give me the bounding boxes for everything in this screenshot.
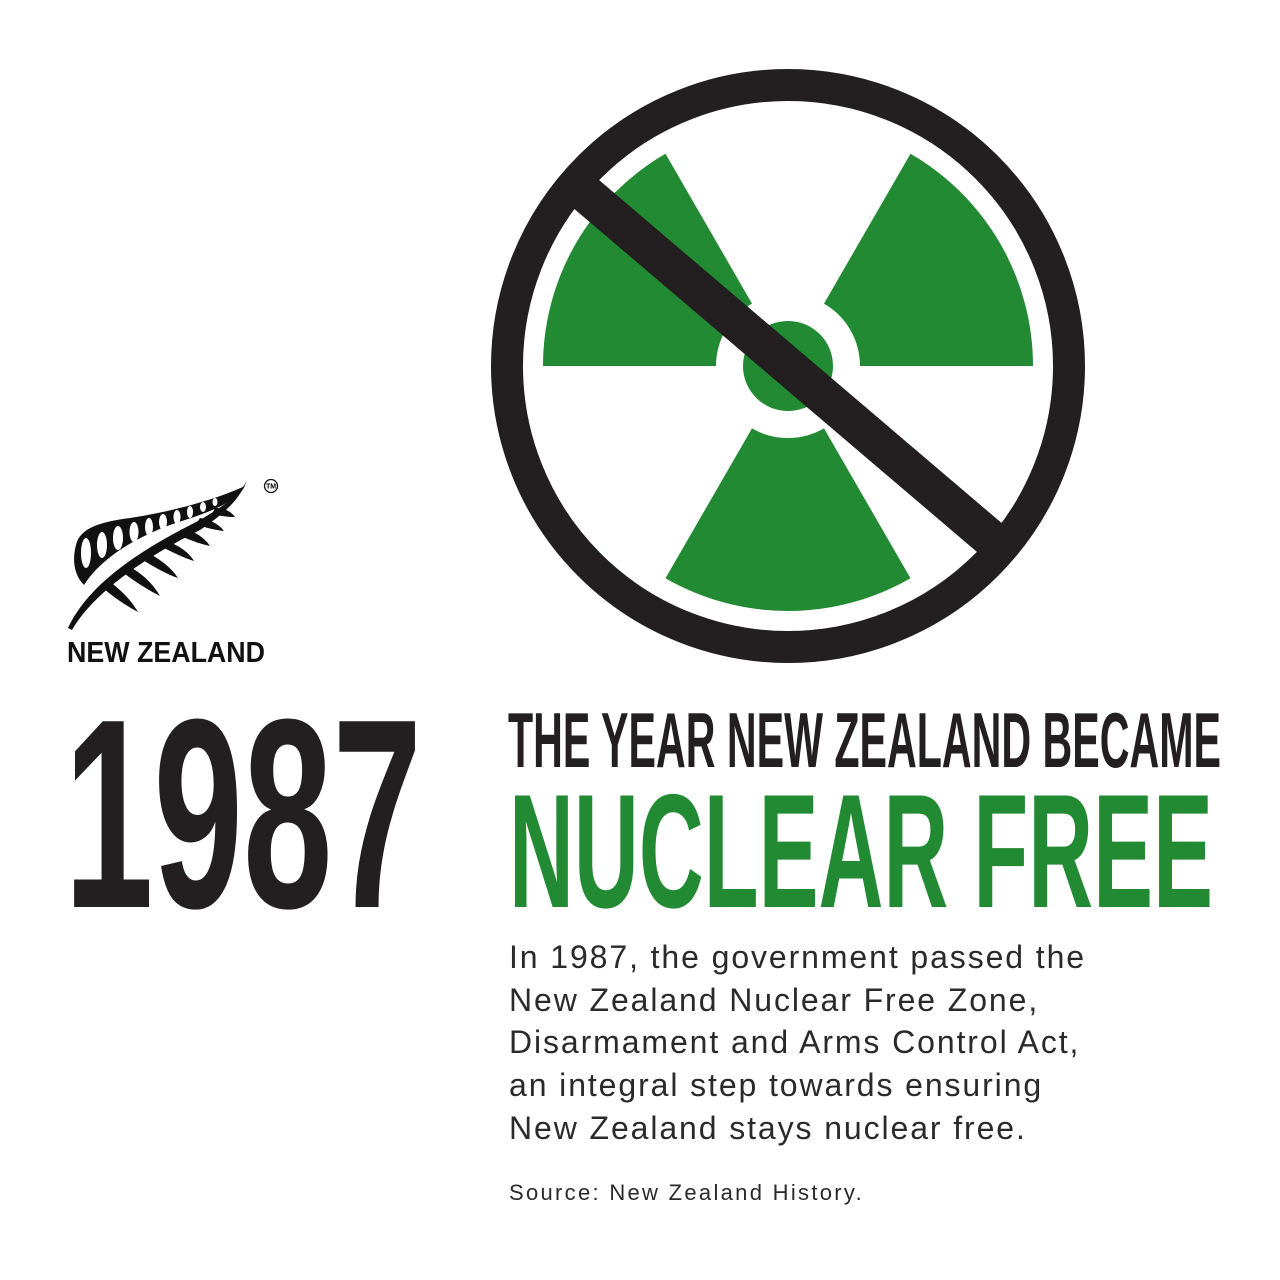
- source: Source: New Zealand History.: [509, 1180, 864, 1205]
- body text: Disarmament and Arms Control Act,: [509, 1024, 1080, 1060]
- logo: silver fern: [68, 480, 247, 630]
- prohibition ring: [507, 85, 1069, 647]
- icon: no-nuclear sign: [507, 85, 1069, 647]
- body text: New Zealand Nuclear Free Zone,: [509, 982, 1039, 1018]
- body text: In 1987, the government passed the: [509, 939, 1086, 975]
- body text: [509, 939, 1086, 1146]
- trademark: [264, 480, 278, 492]
- radiation trefoil: [543, 154, 1033, 611]
- trademark: TM: [266, 484, 276, 490]
- big year: 1987: [64, 664, 422, 965]
- body text: an integral step towards ensuring: [509, 1067, 1043, 1103]
- body text: New Zealand stays nuclear free.: [509, 1110, 1027, 1146]
- prohibition bar: [572, 182, 1004, 550]
- logo text: NEW ZEALAND: [67, 637, 265, 669]
